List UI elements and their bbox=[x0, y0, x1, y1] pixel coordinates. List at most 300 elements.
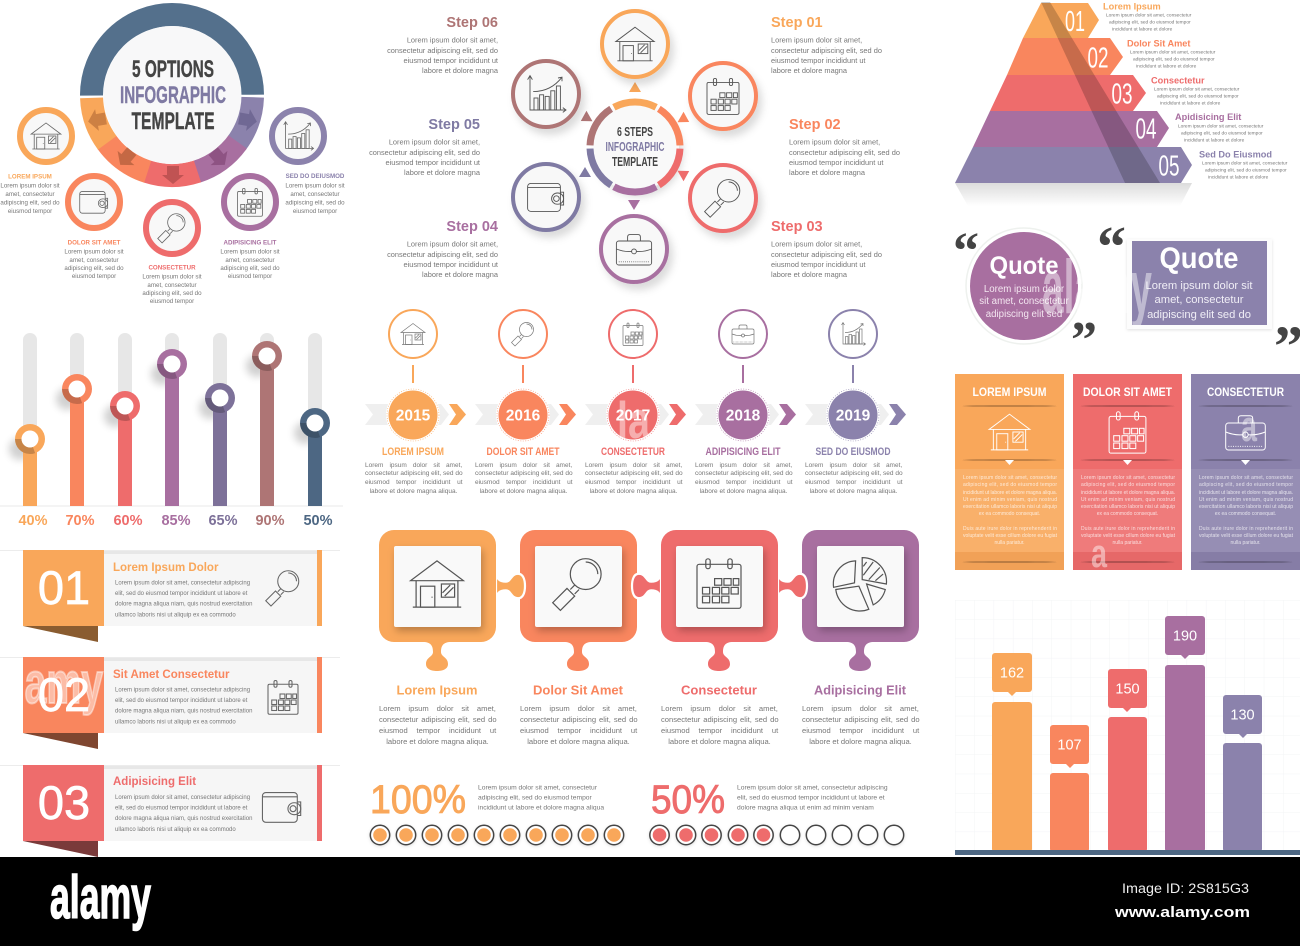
timeline bodies: consectetur adipiscing elit, sed do bbox=[365, 470, 463, 477]
pyramid level texts: adipiscing elit, sed do eiusmod tempor bbox=[1109, 20, 1191, 26]
timeline bodies: labore et dolore magna aliqua. bbox=[700, 488, 788, 495]
center title: INFOGRAPHIC bbox=[120, 82, 226, 109]
option labels: eiusmod tempor bbox=[150, 298, 194, 305]
card: consectetur: incididunt ut labore et dolore magna aliqua. bbox=[1199, 490, 1293, 496]
pyramid numbers: 04 bbox=[1136, 114, 1156, 146]
footer bar bbox=[0, 857, 1300, 946]
percentage description bbox=[478, 784, 604, 812]
pyramid level texts: Dolor Sit Amet bbox=[1127, 38, 1190, 48]
option labels: adipiscing elit, sed do bbox=[142, 290, 202, 297]
timeline bodies: eiusmod tempor incididunt ut bbox=[585, 479, 683, 486]
timeline bodies: eiusmod tempor incididunt ut bbox=[805, 479, 903, 486]
puzzle titles bbox=[396, 682, 907, 698]
card: dolor sit amet: exercitation ullamco laboris nisi ut aliquip bbox=[1081, 504, 1175, 510]
watermark traces: a bbox=[1091, 532, 1108, 576]
ribbon 03: ullamco laboris nisi ut aliquip ex ea commodo bbox=[115, 827, 236, 833]
step 02 text: Step 02 bbox=[789, 117, 841, 133]
option labels: Lorem ipsum dolor sit bbox=[142, 274, 202, 280]
option labels: Lorem ipsum dolor sit bbox=[220, 248, 280, 256]
pyramid level texts bbox=[1103, 2, 1288, 180]
baseline bbox=[0, 506, 343, 507]
puzzle bodies: Lorem ipsum dolor sit amet, bbox=[802, 704, 919, 713]
card: consectetur: CONSECTETUR bbox=[1207, 385, 1284, 399]
timeline bodies: Lorem ipsum dolor sit amet, bbox=[365, 462, 462, 469]
step 04 text bbox=[387, 219, 499, 279]
panel: 5 options circular diagram bbox=[0, 0, 345, 305]
ribbon 02: elit, sed do eiusmod tempor incididunt ut labore et bbox=[115, 698, 248, 704]
quote marks: ” bbox=[1071, 312, 1097, 369]
circular segmented ring bbox=[60, 0, 284, 207]
option labels: Lorem ipsum dolor sit bbox=[285, 182, 345, 190]
value labels: 107 bbox=[1057, 738, 1082, 754]
option labels bbox=[0, 173, 345, 305]
panel: puzzle process bbox=[379, 530, 920, 746]
value labels: 150 bbox=[1115, 682, 1140, 698]
ribbon 03: Adipisicing Elit bbox=[113, 776, 196, 788]
pyramid bands bbox=[955, 3, 1192, 183]
ribbon 01: 01 bbox=[38, 561, 90, 614]
timeline bodies: eiusmod tempor incididunt ut bbox=[695, 479, 793, 486]
footer url: www.alamy.com bbox=[1114, 905, 1250, 921]
progress dots bbox=[370, 825, 624, 845]
ribbon 02: ullamco laboris nisi ut aliquip ex ea commodo bbox=[115, 720, 236, 726]
timeline bodies: Lorem ipsum dolor sit amet, bbox=[475, 462, 572, 469]
image id: Image ID: 2S815G3 bbox=[1122, 881, 1249, 896]
value bubbles bbox=[992, 616, 1262, 768]
pyramid level texts: Lorem ipsum dolor sit amet, consectetur bbox=[1154, 86, 1240, 92]
card: lorem ipsum: Lorem ipsum dolor sit amet, consectetur bbox=[963, 475, 1057, 481]
step circles with icons bbox=[513, 11, 756, 282]
step 03 text: Step 03 bbox=[771, 219, 823, 235]
card: consectetur: Lorem ipsum dolor sit amet, consectetur bbox=[1199, 475, 1293, 481]
percentage description: adipiscing elit, sed do eiusmod tempor bbox=[478, 794, 593, 802]
pyramid level texts: Consectetur bbox=[1151, 76, 1205, 86]
step 01 text: Step 01 bbox=[771, 15, 823, 31]
percentage description: incididunt ut labore et dolore magna aliqua bbox=[478, 804, 604, 812]
quote body: amet, consectetur bbox=[1155, 294, 1244, 306]
panel: year timeline bbox=[365, 310, 906, 495]
option labels: eiusmod tempor bbox=[293, 208, 337, 215]
card: dolor sit amet: Ut enim ad minim veniam, quis nostrud bbox=[1081, 497, 1175, 503]
card: dolor sit amet: DOLOR SIT AMET bbox=[1083, 385, 1173, 399]
timeline headings: DOLOR SIT AMET bbox=[486, 446, 560, 458]
ribbon 01: Lorem Ipsum Dolor bbox=[113, 562, 219, 574]
pyramid level texts: Lorem ipsum dolor sit amet, consectetur bbox=[1178, 124, 1264, 130]
pyramid level texts: adipiscing elit, sed do eiusmod tempor bbox=[1133, 56, 1215, 62]
timeline bodies: consectetur adipiscing elit, sed do bbox=[475, 470, 573, 477]
chart grid bbox=[955, 600, 1300, 850]
center title bbox=[120, 56, 226, 135]
pyramid level texts: incididunt ut labore et dolore bbox=[1184, 138, 1245, 144]
step 03 text: consectetur adipiscing elit, sed do bbox=[771, 250, 882, 259]
puzzle bodies: eiusmod tempor incididunt ut bbox=[520, 726, 638, 735]
tracks bbox=[23, 333, 322, 506]
panel: 6 steps cycle diagram bbox=[369, 11, 900, 282]
percentage labels: 40% bbox=[18, 513, 48, 529]
card: dolor sit amet bbox=[1073, 374, 1182, 570]
ribbon 02: dolore magna aliqua niam, quis nostrud exercitation bbox=[115, 708, 252, 714]
quote heading: Quote bbox=[990, 252, 1059, 280]
quote marks bbox=[1097, 214, 1300, 379]
card: consectetur: ex ea commodo consequat. bbox=[1215, 511, 1276, 517]
pyramid numbers: 02 bbox=[1088, 42, 1108, 74]
card: consectetur: Ut enim ad minim veniam, quis nostrud bbox=[1199, 497, 1293, 503]
pyramid dark diagonal bbox=[1041, 2, 1160, 183]
pyramid level texts: Lorem ipsum dolor sit amet, consectetur bbox=[1202, 160, 1288, 166]
card: dolor sit amet: Lorem ipsum dolor sit amet, consectetur bbox=[1081, 475, 1175, 481]
ribbon 02: 02 bbox=[38, 668, 90, 721]
card: dolor sit amet: incididunt ut labore et dolore magna aliqua. bbox=[1081, 490, 1175, 496]
percentage labels bbox=[18, 513, 333, 529]
coloured chevrons bbox=[449, 404, 906, 425]
card: lorem ipsum: exercitation ullamco laboris nisi ut aliquip bbox=[963, 504, 1057, 510]
panel: numbered ribbons bbox=[0, 550, 340, 857]
option labels: amet, consectetur bbox=[290, 191, 340, 198]
pyramid level texts: incididunt ut labore et dolore bbox=[1208, 174, 1269, 180]
icon circles bbox=[389, 310, 877, 358]
step 02 text: eiusmod tempor incididunt ut bbox=[789, 158, 884, 167]
quote body: adipiscing elit sed bbox=[986, 309, 1062, 320]
year labels: 2016 bbox=[506, 408, 541, 424]
puzzle pieces bbox=[379, 530, 919, 671]
step 01 text: labore et dolore magna bbox=[771, 66, 848, 75]
timeline bodies bbox=[365, 462, 903, 495]
slider 40% bbox=[9, 424, 45, 506]
quote marks: “ bbox=[1097, 214, 1126, 279]
pyramid level texts: Apidisicing Elit bbox=[1175, 112, 1241, 122]
ribbon 01 bbox=[0, 550, 340, 642]
ribbon 01: Lorem ipsum dolor sit amet, consectetur adipiscing bbox=[115, 580, 250, 586]
center title: 5 OPTIONS bbox=[132, 56, 214, 83]
option labels: adipiscing elit, sed do bbox=[0, 200, 60, 206]
option labels: SED DO DEIUSMOD bbox=[286, 173, 345, 180]
slider 65% bbox=[199, 383, 235, 506]
timeline headings: LOREM IPSUM bbox=[382, 446, 444, 458]
option labels: eiusmod tempor bbox=[228, 273, 272, 280]
card: dolor sit amet: ex ea commodo consequat. bbox=[1097, 511, 1158, 517]
option circles with icons bbox=[20, 110, 324, 254]
timeline bodies: Lorem ipsum dolor sit amet, bbox=[695, 462, 792, 469]
center title: 6 STEPS bbox=[617, 124, 653, 139]
puzzle bodies: eiusmod tempor incididunt ut bbox=[379, 726, 497, 735]
quote body: Lorem ipsum dolor bbox=[984, 284, 1065, 295]
timeline bodies: eiusmod tempor incididunt ut bbox=[365, 479, 463, 486]
puzzle bodies: labore et dolore magna aliqua. bbox=[809, 737, 912, 746]
card: lorem ipsum: incididunt ut labore et dolore magna aliqua. bbox=[963, 490, 1057, 496]
step 01 text bbox=[771, 15, 882, 75]
card: consectetur: voluptate velit esse cillum dolore eu fugiat bbox=[1199, 533, 1294, 539]
step 04 text: labore et dolore magna bbox=[422, 270, 499, 279]
option labels: adipiscing elit, sed do bbox=[64, 265, 124, 272]
timeline bodies: consectetur adipiscing elit, sed do bbox=[585, 470, 683, 477]
step 05 text bbox=[369, 117, 481, 177]
option labels: eiusmod tempor bbox=[8, 208, 52, 215]
option labels: amet, consectetur bbox=[69, 257, 119, 264]
timeline headings: CONSECTETUR bbox=[601, 446, 665, 458]
pyramid level texts: adipiscing elit, sed do eiusmod tempor bbox=[1181, 130, 1263, 136]
step 04 text: Lorem ipsum dolor sit amet, bbox=[407, 240, 498, 248]
percentage description: Lorem ipsum dolor sit amet, consectetur adipiscing bbox=[737, 784, 888, 792]
card: dolor sit amet: nulla pariatur. bbox=[1112, 540, 1143, 546]
pyramid numbers: 01 bbox=[1065, 6, 1085, 38]
step 06 text: eiusmod tempor incididunt ut bbox=[404, 56, 498, 65]
card: lorem ipsum: Ut enim ad minim veniam, quis nostrud bbox=[963, 497, 1057, 503]
quote body: adipiscing elit sed do bbox=[1147, 309, 1251, 321]
pyramid level texts: Lorem ipsum dolor sit amet, consectetur bbox=[1130, 50, 1216, 56]
pyramid level texts: adipiscing elit, sed do eiusmod tempor bbox=[1157, 94, 1239, 100]
percentage description: Lorem ipsum dolor sit amet, consectetur bbox=[478, 784, 598, 792]
panel: round quote bbox=[953, 223, 1097, 369]
slider 50% bbox=[294, 408, 330, 506]
timeline bodies: labore et dolore magna aliqua. bbox=[480, 488, 568, 495]
quote marks: “ bbox=[953, 223, 979, 280]
percentage labels: 70% bbox=[65, 513, 95, 529]
progress dots bbox=[650, 825, 904, 845]
watermark traces: a bbox=[1241, 402, 1257, 451]
center circle bbox=[104, 26, 242, 164]
panel: 50% progress bbox=[650, 778, 904, 845]
ribbon 03: Lorem ipsum dolor sit amet, consectetur adipiscing bbox=[115, 795, 250, 801]
pyramid level texts: Lorem ipsum dolor sit amet, consectetur bbox=[1106, 12, 1192, 18]
year labels: 2015 bbox=[396, 408, 431, 424]
quote circle bbox=[966, 228, 1082, 344]
ribbon 03 bbox=[0, 765, 340, 857]
value labels: 162 bbox=[1000, 666, 1024, 682]
step 06 text: Lorem ipsum dolor sit amet, bbox=[407, 36, 498, 44]
step 03 text: Lorem ipsum dolor sit amet, bbox=[771, 240, 862, 248]
pyramid level texts: Lorem Ipsum bbox=[1103, 2, 1161, 12]
ribbon 01: elit, sed do eiusmod tempor incididunt ut labore et bbox=[115, 591, 248, 597]
puzzle bodies bbox=[379, 704, 920, 746]
panel: rectangular quote bbox=[1097, 214, 1300, 379]
percentage labels: 85% bbox=[161, 513, 191, 529]
step 06 text: consectetur adipiscing elit, sed do bbox=[387, 46, 498, 55]
percentage description bbox=[737, 784, 888, 812]
option labels: LOREM IPSUM bbox=[8, 174, 52, 180]
puzzle inner tiles with icons bbox=[394, 546, 904, 627]
puzzle bodies: eiusmod tempor incididunt ut bbox=[661, 726, 779, 735]
panel: slider bar chart bbox=[0, 333, 343, 529]
step 03 text: labore et dolore magna bbox=[771, 270, 848, 279]
pyramid numbers bbox=[1065, 6, 1180, 182]
percentage labels: 60% bbox=[113, 513, 143, 529]
watermark traces: la bbox=[617, 392, 651, 450]
big percentage: 50% bbox=[651, 778, 725, 822]
card: consectetur: Duis aute irure dolor in reprehenderit in bbox=[1199, 526, 1293, 532]
step 03 text bbox=[771, 219, 882, 279]
puzzle titles: Consectetur bbox=[681, 682, 757, 698]
option labels: amet, consectetur bbox=[225, 257, 275, 264]
year labels: 2019 bbox=[836, 408, 871, 424]
timeline bodies: consectetur adipiscing elit, sed do bbox=[695, 470, 793, 477]
step 04 text: eiusmod tempor incididunt ut bbox=[404, 260, 498, 269]
step 02 text: consectetur adipiscing elit, sed do bbox=[789, 148, 900, 157]
pyramid numbers: 03 bbox=[1112, 78, 1132, 110]
quote body bbox=[1146, 280, 1253, 321]
ribbon 03: 03 bbox=[38, 776, 90, 829]
footer logo: alamy bbox=[50, 864, 151, 931]
center title bbox=[606, 124, 665, 169]
step 05 text: Step 05 bbox=[428, 117, 480, 133]
panel: feature cards bbox=[955, 374, 1300, 570]
ribbon 03: dolore magna aliqua niam, quis nostrud exercitation bbox=[115, 816, 252, 822]
card: lorem ipsum bbox=[955, 374, 1064, 570]
percentage description: dolore magna aliqua ut enim ad minim veniam bbox=[737, 804, 874, 812]
center title: TEMPLATE bbox=[612, 154, 658, 169]
ribbon 03: elit, sed do eiusmod tempor incididunt ut labore et bbox=[115, 806, 248, 812]
ribbon 01: ullamco laboris nisi ut aliquip ex ea commodo bbox=[115, 612, 236, 618]
option labels: adipiscing elit, sed do bbox=[285, 200, 345, 206]
puzzle bodies: Lorem ipsum dolor sit amet, bbox=[661, 704, 778, 713]
timeline bodies: labore et dolore magna aliqua. bbox=[370, 488, 458, 495]
step 05 text: consectetur adipiscing elit, sed do bbox=[369, 148, 480, 157]
quote box bbox=[1127, 239, 1272, 329]
bars bbox=[992, 665, 1262, 852]
slider 85% bbox=[151, 349, 187, 506]
card: dolor sit amet: adipiscing elit, sed do eiusmod tempor bbox=[1081, 482, 1175, 488]
timeline bodies: eiusmod tempor incididunt ut bbox=[475, 479, 573, 486]
timeline headings bbox=[382, 446, 891, 458]
timeline bodies: labore et dolore magna aliqua. bbox=[590, 488, 678, 495]
puzzle bodies: consectetur adipiscing elit, sed do bbox=[661, 715, 779, 724]
pyramid level texts: Sed Do Eiusmod bbox=[1199, 150, 1272, 160]
percentage description: elit, sed do eiusmod tempor incididunt ut labore et bbox=[737, 794, 885, 802]
card: lorem ipsum: adipiscing elit, sed do eiusmod tempor bbox=[963, 482, 1057, 488]
puzzle bodies: labore et dolore magna aliqua. bbox=[386, 737, 489, 746]
option labels: amet, consectetur bbox=[5, 191, 55, 198]
step 02 text: labore et dolore magna bbox=[789, 168, 866, 177]
step 03 text: eiusmod tempor incididunt ut bbox=[771, 260, 866, 269]
panel: 100% progress bbox=[370, 778, 624, 845]
step 05 text: labore et dolore magna bbox=[404, 168, 481, 177]
timeline headings: SED DO EIUSMOD bbox=[816, 446, 891, 458]
value labels bbox=[1000, 628, 1255, 754]
pyramid numbers: 05 bbox=[1158, 150, 1180, 182]
percentage labels: 65% bbox=[208, 513, 238, 529]
puzzle bodies: Lorem ipsum dolor sit amet, bbox=[379, 704, 496, 713]
card: lorem ipsum: voluptate velit esse cillum dolore eu fugiat bbox=[963, 533, 1058, 539]
ribbon 02 bbox=[0, 651, 340, 749]
option labels: ADIPISICING ELIT bbox=[224, 240, 277, 246]
puzzle bodies: consectetur adipiscing elit, sed do bbox=[520, 715, 638, 724]
slider 60% bbox=[104, 391, 140, 506]
step 02 text: Lorem ipsum dolor sit amet, bbox=[789, 138, 880, 146]
option labels: eiusmod tempor bbox=[72, 273, 116, 280]
pyramid level texts: incididunt ut labore et dolore bbox=[1112, 26, 1173, 32]
quote heading: Quote bbox=[1160, 242, 1238, 275]
value labels: 190 bbox=[1173, 628, 1197, 644]
puzzle bodies: labore et dolore magna aliqua. bbox=[668, 737, 771, 746]
timeline chevrons bbox=[365, 404, 889, 425]
card: lorem ipsum: ex ea commodo consequat. bbox=[979, 511, 1040, 517]
value labels: 130 bbox=[1230, 708, 1255, 724]
puzzle bodies: labore et dolore magna aliqua. bbox=[527, 737, 630, 746]
ring arrows bbox=[86, 108, 259, 184]
center title: TEMPLATE bbox=[132, 108, 214, 135]
step 01 text: Lorem ipsum dolor sit amet, bbox=[771, 36, 862, 44]
percentage labels: 90% bbox=[255, 513, 285, 529]
center ring bbox=[573, 85, 697, 209]
year labels: 2017 bbox=[616, 408, 650, 424]
quote marks bbox=[953, 223, 1097, 369]
center title: INFOGRAPHIC bbox=[606, 139, 665, 154]
year labels: 2018 bbox=[726, 408, 761, 424]
step 01 text: consectetur adipiscing elit, sed do bbox=[771, 46, 882, 55]
card: consectetur: exercitation ullamco laboris nisi ut aliquip bbox=[1199, 504, 1293, 510]
card: consectetur: nulla pariatur. bbox=[1230, 540, 1261, 546]
chart baseline bbox=[955, 850, 1300, 855]
timeline headings: ADIPISICING ELIT bbox=[706, 446, 781, 458]
puzzle titles: Adipisicing Elit bbox=[814, 682, 907, 698]
pyramid reflection bbox=[955, 183, 1192, 206]
quote body bbox=[979, 284, 1069, 320]
step 02 text bbox=[789, 117, 900, 177]
year circles bbox=[386, 388, 880, 442]
card: consectetur: adipiscing elit, sed do eiusmod tempor bbox=[1199, 482, 1293, 488]
step 05 text: eiusmod tempor incididunt ut bbox=[386, 158, 480, 167]
percentage labels: 50% bbox=[303, 513, 333, 529]
timeline bodies: Lorem ipsum dolor sit amet, bbox=[805, 462, 902, 469]
card: lorem ipsum: LOREM IPSUM bbox=[972, 385, 1046, 399]
puzzle titles: Dolor Sit Amet bbox=[533, 682, 624, 698]
step 06 text: labore et dolore magna bbox=[422, 66, 499, 75]
card: lorem ipsum: Duis aute irure dolor in reprehenderit in bbox=[963, 526, 1057, 532]
option labels: CONSECTETUR bbox=[148, 264, 196, 272]
timeline bodies: consectetur adipiscing elit, sed do bbox=[805, 470, 903, 477]
puzzle titles: Lorem Ipsum bbox=[396, 682, 478, 698]
puzzle bodies: consectetur adipiscing elit, sed do bbox=[802, 715, 920, 724]
watermark traces: alamy bbox=[1042, 245, 1152, 330]
step 05 text: Lorem ipsum dolor sit amet, bbox=[389, 138, 480, 146]
puzzle bodies: Lorem ipsum dolor sit amet, bbox=[520, 704, 637, 713]
timeline bodies: Lorem ipsum dolor sit amet, bbox=[585, 462, 682, 469]
slider 90% bbox=[246, 341, 282, 506]
option labels: adipiscing elit, sed do bbox=[220, 265, 280, 272]
puzzle bodies: consectetur adipiscing elit, sed do bbox=[379, 715, 497, 724]
step 04 text: Step 04 bbox=[446, 219, 498, 235]
option labels: Lorem ipsum dolor sit bbox=[64, 248, 124, 256]
step 01 text: eiusmod tempor incididunt ut bbox=[771, 56, 866, 65]
pyramid level texts: incididunt ut labore et dolore bbox=[1136, 64, 1197, 70]
year labels bbox=[396, 408, 871, 424]
step 06 text: Step 06 bbox=[446, 15, 498, 31]
slider 70% bbox=[56, 374, 92, 506]
connectors bbox=[413, 365, 853, 383]
ribbon 02: Sit Amet Consectetur bbox=[113, 669, 230, 681]
option labels: Lorem ipsum dolor sit bbox=[0, 182, 60, 190]
pyramid level texts: adipiscing elit, sed do eiusmod tempor bbox=[1205, 168, 1287, 174]
card: dolor sit amet: voluptate velit esse cillum dolore eu fugiat bbox=[1081, 533, 1176, 539]
step 04 text: consectetur adipiscing elit, sed do bbox=[387, 250, 498, 259]
timeline bodies: labore et dolore magna aliqua. bbox=[810, 488, 898, 495]
quote body: sit amet, consectetur bbox=[979, 296, 1069, 307]
puzzle bodies: eiusmod tempor incididunt ut bbox=[802, 726, 920, 735]
ribbon 01: dolore magna aliqua niam, quis nostrud exercitation bbox=[115, 602, 252, 608]
option labels: amet, consectetur bbox=[147, 282, 197, 289]
card: dolor sit amet: Duis aute irure dolor in reprehenderit in bbox=[1081, 526, 1175, 532]
panel: bar chart bbox=[955, 600, 1300, 855]
big percentage: 100% bbox=[370, 778, 466, 822]
pyramid level texts: incididunt ut labore et dolore bbox=[1160, 100, 1221, 106]
direction triangles bbox=[578, 82, 692, 210]
card: consectetur bbox=[1191, 374, 1300, 570]
step 06 text bbox=[387, 15, 499, 75]
card: lorem ipsum: nulla pariatur. bbox=[994, 540, 1025, 546]
ribbon 02: Lorem ipsum dolor sit amet, consectetur adipiscing bbox=[115, 688, 250, 694]
watermark traces bbox=[617, 245, 1257, 576]
quote body: Lorem ipsum dolor sit bbox=[1146, 280, 1253, 292]
panel: pyramid bbox=[955, 2, 1288, 206]
